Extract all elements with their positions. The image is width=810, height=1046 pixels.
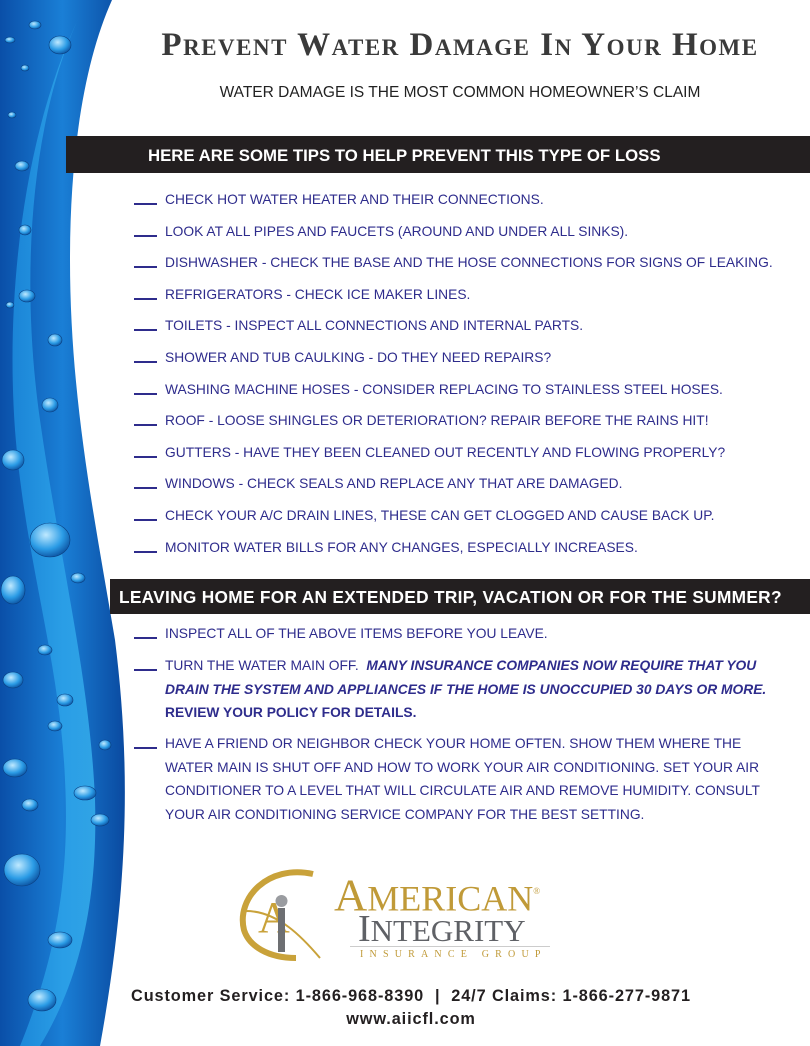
title: Prevent Water Damage In Your Home xyxy=(161,27,759,63)
logo wordmark: AMERICAN® xyxy=(334,869,540,920)
subtitle: WATER DAMAGE IS THE MOST COMMON HOMEOWNER’S CLAIM xyxy=(220,84,700,101)
logo xyxy=(240,869,550,961)
footer contact: www.aiicfl.com xyxy=(346,1010,476,1028)
footer contact xyxy=(131,987,691,1028)
tips list: CHECK HOT WATER HEATER AND THEIR CONNECTIONS. xyxy=(165,192,544,207)
heading bar: leaving home: LEAVING HOME FOR AN EXTENDED TRIP, VACATION OR FOR THE SUMMER? xyxy=(119,587,782,607)
vacation list: INSPECT ALL OF THE ABOVE ITEMS BEFORE YOU LEAVE. xyxy=(165,626,548,641)
logo: INTEGRITY xyxy=(358,908,526,950)
vacation list: TURN THE WATER MAIN OFF. MANY INSURANCE COMPANIES NOW REQUIRE THAT YOU xyxy=(165,658,756,673)
heading bar: leaving home xyxy=(110,579,810,614)
vacation list: WATER MAIN IS SHUT OFF AND HOW TO WORK YOUR AIR CONDITIONING. SET YOUR AIR xyxy=(165,760,759,774)
tips list: WASHING MACHINE HOSES - CONSIDER REPLACING TO STAINLESS STEEL HOSES. xyxy=(165,382,723,397)
vacation list: HAVE A FRIEND OR NEIGHBOR CHECK YOUR HOME OFTEN. SHOW THEM WHERE THE xyxy=(165,736,741,751)
heading bar: tips xyxy=(66,136,810,173)
vacation list: CONDITIONER TO A LEVEL THAT WILL CIRCULATE AIR AND REMOVE HUMIDITY. CONSULT xyxy=(165,783,760,798)
vacation list: DRAIN THE SYSTEM AND APPLIANCES IF THE HOME IS UNOCCUPIED 30 DAYS OR MORE. xyxy=(165,682,766,696)
tips list: REFRIGERATORS - CHECK ICE MAKER LINES. xyxy=(165,287,470,302)
logo emblem xyxy=(240,869,321,961)
tips list: DISHWASHER - CHECK THE BASE AND THE HOSE CONNECTIONS FOR SIGNS OF LEAKING. xyxy=(165,255,773,270)
tips list: TOILETS - INSPECT ALL CONNECTIONS AND INTERNAL PARTS. xyxy=(165,318,583,333)
tips list: SHOWER AND TUB CAULKING - DO THEY NEED REPAIRS? xyxy=(165,350,551,365)
vacation list: REVIEW YOUR POLICY FOR DETAILS. xyxy=(165,705,416,720)
tips list: GUTTERS - HAVE THEY BEEN CLEANED OUT RECENTLY AND FLOWING PROPERLY? xyxy=(165,445,725,460)
heading bar: tips: HERE ARE SOME TIPS TO HELP PREVENT THIS TYPE OF LOSS xyxy=(148,146,661,165)
footer contact: Customer Service: 1-866-968-8390 | 24/7 Claims: 1-866-277-9871 xyxy=(131,987,691,1005)
tips list: CHECK YOUR A/C DRAIN LINES, THESE CAN GET CLOGGED AND CAUSE BACK UP. xyxy=(165,508,714,523)
logo: INSURANCE GROUP xyxy=(360,949,547,960)
vacation list: YOUR AIR CONDITIONING SERVICE COMPANY FOR THE BEST SETTING. xyxy=(165,806,644,822)
logo emblem: A xyxy=(258,893,290,942)
tips list: WINDOWS - CHECK SEALS AND REPLACE ANY THAT ARE DAMAGED. xyxy=(165,476,622,491)
tips list: ROOF - LOOSE SHINGLES OR DETERIORATION? REPAIR BEFORE THE RAINS HIT! xyxy=(165,413,709,428)
vacation list xyxy=(134,626,766,822)
tips list: LOOK AT ALL PIPES AND FAUCETS (AROUND AND UNDER ALL SINKS). xyxy=(165,224,628,239)
tips list: MONITOR WATER BILLS FOR ANY CHANGES, ESPECIALLY INCREASES. xyxy=(165,540,638,555)
decorative water band xyxy=(0,0,125,1046)
tips list xyxy=(134,192,773,555)
